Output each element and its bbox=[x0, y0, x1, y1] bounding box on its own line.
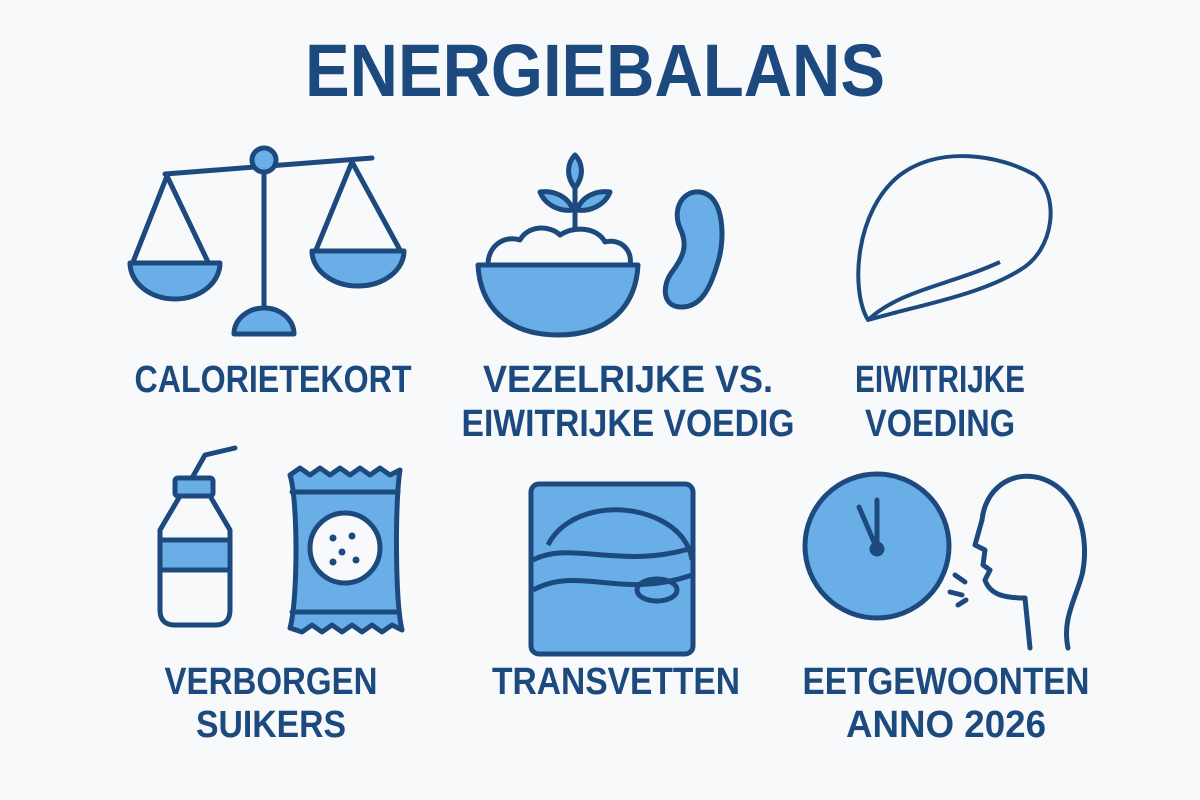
label: eiwitrijke voeding bbox=[855, 359, 1025, 445]
label: eetgewoonten anno 2026: EETGEWOONTEN bbox=[802, 661, 1090, 703]
label: verborgen suikers: VERBORGEN bbox=[164, 661, 378, 703]
icon: bottle and chip bag bbox=[160, 448, 402, 632]
label: calorietekort: CALORIETEKORT bbox=[134, 359, 412, 401]
label: verborgen suikers: SUIKERS bbox=[196, 704, 346, 746]
label: transvetten: TRANSVETTEN bbox=[492, 661, 740, 703]
label: verborgen suikers bbox=[164, 661, 378, 746]
label: vezelrijke vs eiwitrijke: EIWITRIJKE VOEDIG bbox=[462, 403, 794, 445]
icon: clock and head bbox=[805, 474, 1085, 648]
icon: trans fat square bbox=[531, 484, 693, 654]
label: eiwitrijke voeding: VOEDING bbox=[865, 403, 1015, 445]
icon: outline shape bbox=[858, 156, 1051, 320]
icon: balance scale bbox=[130, 148, 404, 334]
label: eiwitrijke voeding: EIWITRIJKE bbox=[855, 359, 1025, 401]
icon: bowl with plant and bean bbox=[478, 155, 722, 335]
label: vezelrijke vs eiwitrijke bbox=[462, 359, 794, 445]
label: vezelrijke vs eiwitrijke: VEZELRIJKE VS. bbox=[483, 359, 773, 401]
title: ENERGIEBALANS bbox=[305, 29, 885, 112]
label: eetgewoonten anno 2026 bbox=[802, 661, 1090, 746]
label: eetgewoonten anno 2026: ANNO 2026 bbox=[846, 704, 1046, 746]
